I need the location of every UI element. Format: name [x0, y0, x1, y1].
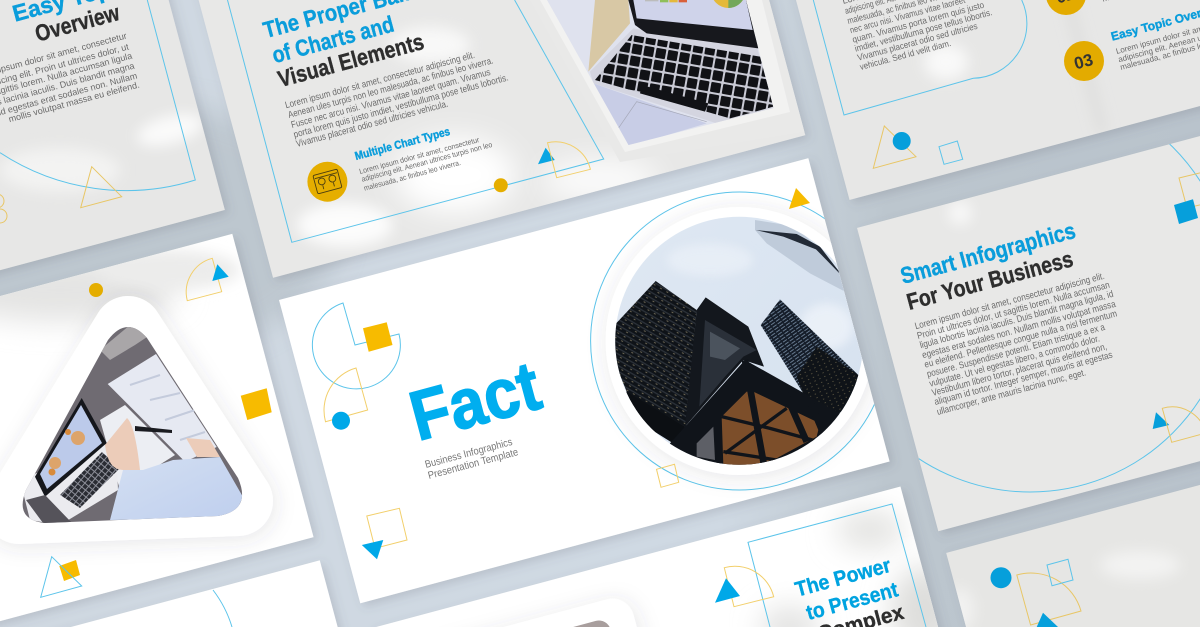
panel: right slide Smart Infographics: [828, 86, 1200, 531]
heading: The Proper Balance of Charts and Visual Elements: [262, 0, 424, 86]
frame line: [813, 0, 1027, 115]
decoration: blue three-quarter circle: [312, 303, 400, 389]
subtitle: Business Infographics: [424, 436, 514, 471]
body text: Vivamus placerat odio sed ultricies vehicula.: [295, 99, 449, 150]
body text: Proin ut ultrices dolor, ut sagittis lorem. Nulla accumsan: [916, 280, 1111, 342]
pavilion: [653, 360, 840, 477]
topic body: [1101, 0, 1200, 72]
sub body text: Lorem ipsum dolor sit amet, consectetur: [358, 135, 481, 176]
right tower: [761, 299, 858, 417]
panel: bottom-right slide: [946, 411, 1200, 627]
decoration: yellow triangle: [873, 126, 916, 168]
heading: The Proper Balance of Charts and Visual Elements: of Charts and: [269, 11, 397, 68]
decoration: blue dot: [990, 567, 1012, 588]
photo frame inner band: [540, 0, 790, 152]
body text: imdiet, vestibulluma pose tellus lobortis.: [854, 7, 993, 54]
number badge 02: [1046, 0, 1086, 15]
left tower: [610, 281, 697, 443]
decoration: blue triangle: [212, 264, 229, 281]
decoration: yellow quarter: [724, 566, 774, 607]
decoration: yellow quarter: [324, 368, 368, 422]
sub body text: malesuada, ac finibus leo viverra.: [363, 158, 462, 193]
decoration: yellow square: [363, 322, 392, 352]
photo card corner: [414, 594, 680, 627]
middle tower: [685, 297, 764, 427]
decoration: yellow quarter: [548, 142, 590, 178]
body text: aliquam id tortor. Integer semper, mauris at egestas: [933, 350, 1114, 408]
body text: mollis volutpat massa eu eleifend.: [7, 80, 141, 124]
subheading: Multiple Chart Types: Multiple Chart Types: [354, 126, 451, 163]
decoration: yellow quarter: [186, 258, 222, 301]
body text: [914, 271, 1118, 418]
body text: Fusce nec arcu nisi. Vivamus vitae laoreet quam. Vivamus: [290, 67, 492, 131]
heading: Smart Infographics For Your Business: [898, 217, 1078, 315]
decoration: yellow square: [241, 388, 272, 420]
white photo ring: [606, 207, 874, 475]
title: Fact: Fact: [402, 346, 548, 455]
decoration: yellow quarter: [1162, 407, 1200, 442]
subtitle: Presentation Template: [427, 446, 520, 482]
panel: top-right slide: [768, 0, 1200, 200]
arc line: [213, 590, 232, 627]
body text: egestas erat sodales non. Nullam mollis volutpat massa: [921, 299, 1118, 361]
upper right building: [755, 220, 848, 293]
body text: Vivamus placerat odio sed ultricies: [856, 21, 979, 63]
large circle outline: [828, 88, 1200, 492]
decoration: blue triangle outline: [41, 557, 82, 597]
decoration: yellow dot: [89, 283, 103, 297]
panel: left slide with triangle photo: [0, 234, 314, 627]
heading: Smart Infographics For Your Business: For Your Business: [904, 245, 1076, 315]
heading: The Power to Present Complex: to Present: [804, 578, 901, 625]
frame line: [748, 504, 926, 627]
decoration: yellow rings: [0, 194, 7, 223]
body text: [0, 31, 141, 124]
panel: top-left slide: [0, 0, 228, 276]
photo corner: [400, 618, 633, 627]
body text: [841, 0, 998, 72]
body text: porta lorem quis justo imdiet, vestibulluma pose tellus lobortis.: [292, 73, 510, 141]
panel: top-middle slide: [192, 0, 815, 278]
panel: bottom-middle slide The Power to Present: [371, 487, 982, 627]
triangle frame: [19, 331, 238, 509]
large circle outline: [591, 192, 889, 490]
decoration: yellow triangle: [789, 188, 810, 209]
decoration: blue dot: [893, 132, 911, 150]
circular photo: skyscrapers: [610, 210, 870, 477]
decoration: small yellow square outline: [656, 464, 679, 487]
laptop photo: [543, 0, 783, 150]
background shade top left: [0, 100, 340, 360]
decoration: blue dot: [332, 412, 350, 430]
decoration: blue square outline: [939, 141, 963, 164]
body text: Lorem ipsum dolor sit amet, consectetur adipiscing elit.: [914, 271, 1106, 332]
decoration: yellow square outline: [1179, 170, 1200, 208]
decoration: blue square outline: [1047, 559, 1073, 586]
fold shade: [1068, 0, 1103, 133]
number badge 03: 03: [1072, 50, 1095, 73]
body text: vehicula. Sed id velit diam.: [859, 38, 952, 72]
panel: lower-left slide: [72, 560, 343, 627]
body text: [284, 50, 510, 150]
body text: Vestibulum libero tortor, placerat quis eleifend non,: [931, 341, 1108, 399]
heading: The Power to Present Complex: The Power: [793, 554, 893, 602]
decoration: blue square: [1174, 199, 1198, 224]
decoration: yellow square outline: [367, 508, 407, 548]
decoration: yellow dot: [494, 178, 508, 192]
body text: vulputate. Ut vel egestas libero, a commodo dolor.: [928, 333, 1101, 390]
decoration: yellow quarter: [1017, 573, 1081, 625]
decoration: yellow small square: [59, 560, 80, 581]
number badge 03: [1064, 41, 1104, 81]
body text: Lorem ipsum dolor sit amet, consectetur adipiscing elit.: [284, 50, 476, 111]
heading: Smart Infographics For Your Business: Smart Infographics: [898, 217, 1078, 289]
body text: ullamcorper, ante mauris lacinia nunc, eget.: [936, 367, 1087, 418]
body text: posuere. Suspendisse potenti. Etiam tristique a ex a: [926, 322, 1107, 380]
panel: center title slide: [279, 158, 890, 603]
body text: ligula lobortis lacinia iaculis. Duis blandit magna ligula, id: [919, 289, 1115, 351]
decoration: blue triangle: [1031, 613, 1058, 627]
heading: The Proper Balance of Charts and Visual Elements: Visual Elements: [275, 28, 427, 92]
decoration: blue triangle: [538, 148, 555, 164]
frame line: [228, 0, 604, 242]
frame line: [0, 0, 195, 191]
decoration: blue triangle: [715, 578, 740, 603]
heading: The Power to Present Complex: [793, 554, 907, 627]
sub body text: adipiscing elit. Aenean ultrices turpis non leo: [360, 140, 493, 184]
decoration: blue triangle: [1153, 412, 1169, 429]
triangle photo: [22, 327, 242, 523]
body text: Aenean ules turpis non leo malesuada, ac finibus leo viverra.: [287, 55, 495, 121]
heading: Easy Topic Overview: [12, 0, 118, 40]
decoration: yellow triangle: [81, 167, 122, 208]
icon: chart in yellow circle: [307, 162, 347, 202]
decoration: blue triangle: [362, 540, 383, 559]
body text: eu eleifend. Pellentesque congue nulla a nisl fermentum: [923, 308, 1118, 371]
photo frame: [620, 0, 804, 162]
